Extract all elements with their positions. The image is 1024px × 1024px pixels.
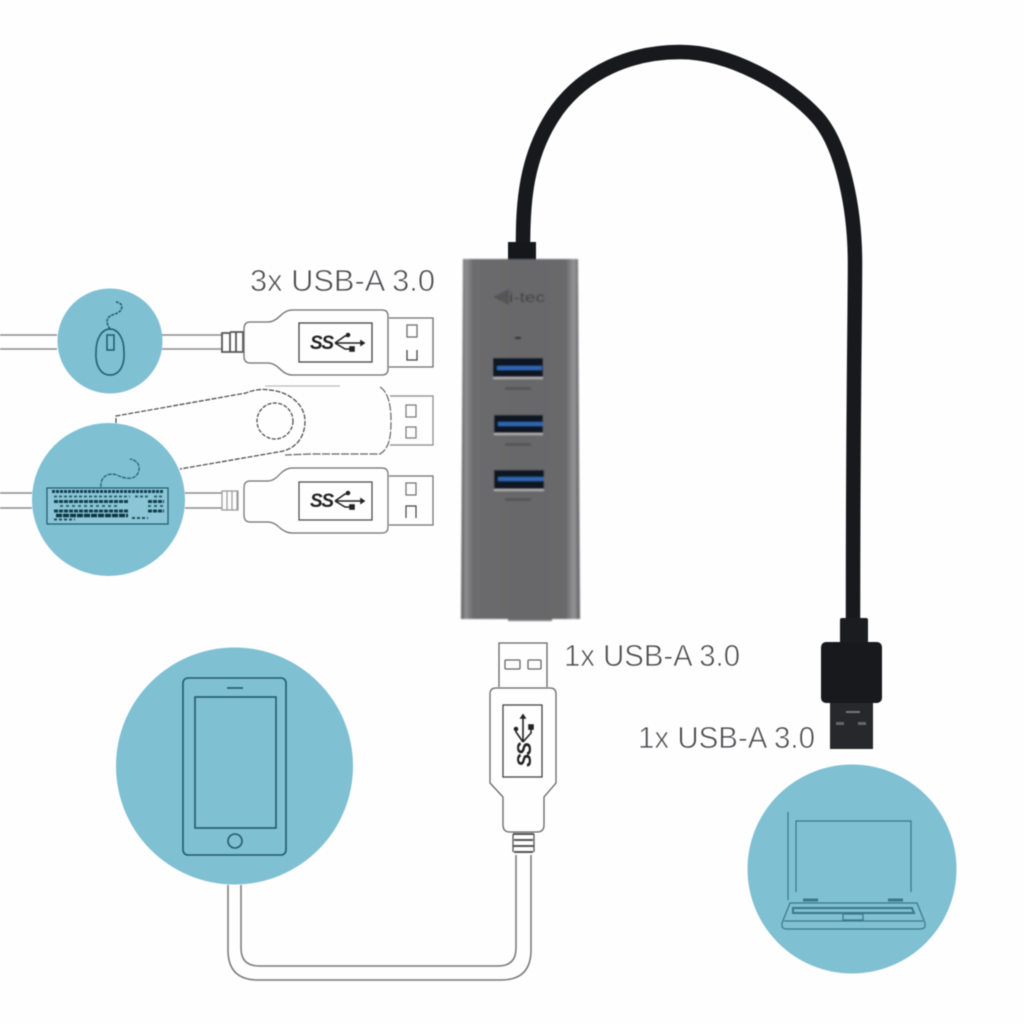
phone cable [228, 855, 531, 980]
icon: laptop [782, 812, 925, 929]
keyboard cable [0, 493, 222, 508]
hub logo: i-tec [509, 289, 545, 305]
USB plug: vertical [490, 643, 556, 852]
USB port 3 [494, 470, 544, 501]
circle: keyboard [32, 423, 185, 576]
black hub cable [508, 52, 855, 622]
mouse cable [0, 335, 222, 349]
circle: mouse [58, 288, 162, 394]
USB plug: lower [222, 468, 433, 533]
USB logo [310, 491, 364, 512]
USB logo [310, 333, 364, 354]
label: 1x USB-A 3.0 cable plug: 1x USB-A 3.0 [638, 720, 815, 755]
USB port 1 [493, 358, 543, 390]
USB logo [514, 715, 536, 767]
label: 1x USB-A 3.0 hub port: 1x USB-A 3.0 [564, 638, 740, 673]
circle: smartphone [116, 648, 353, 884]
circle: laptop [748, 764, 956, 974]
USB logo: SS [514, 741, 536, 767]
black USB-A plug [821, 618, 882, 749]
USB logo: SS [310, 333, 334, 354]
USB flash drive [116, 386, 433, 469]
USB plug: top [222, 310, 433, 375]
USB port 2 [494, 415, 543, 446]
hub logo [493, 289, 545, 339]
icon: mouse [96, 302, 124, 375]
silver hub body [461, 259, 580, 621]
USB logo: SS [310, 491, 334, 512]
icon: keyboard [47, 459, 168, 524]
label: 3x USB-A 3.0: 3x USB-A 3.0 [250, 263, 435, 298]
icon: smartphone [183, 678, 286, 855]
